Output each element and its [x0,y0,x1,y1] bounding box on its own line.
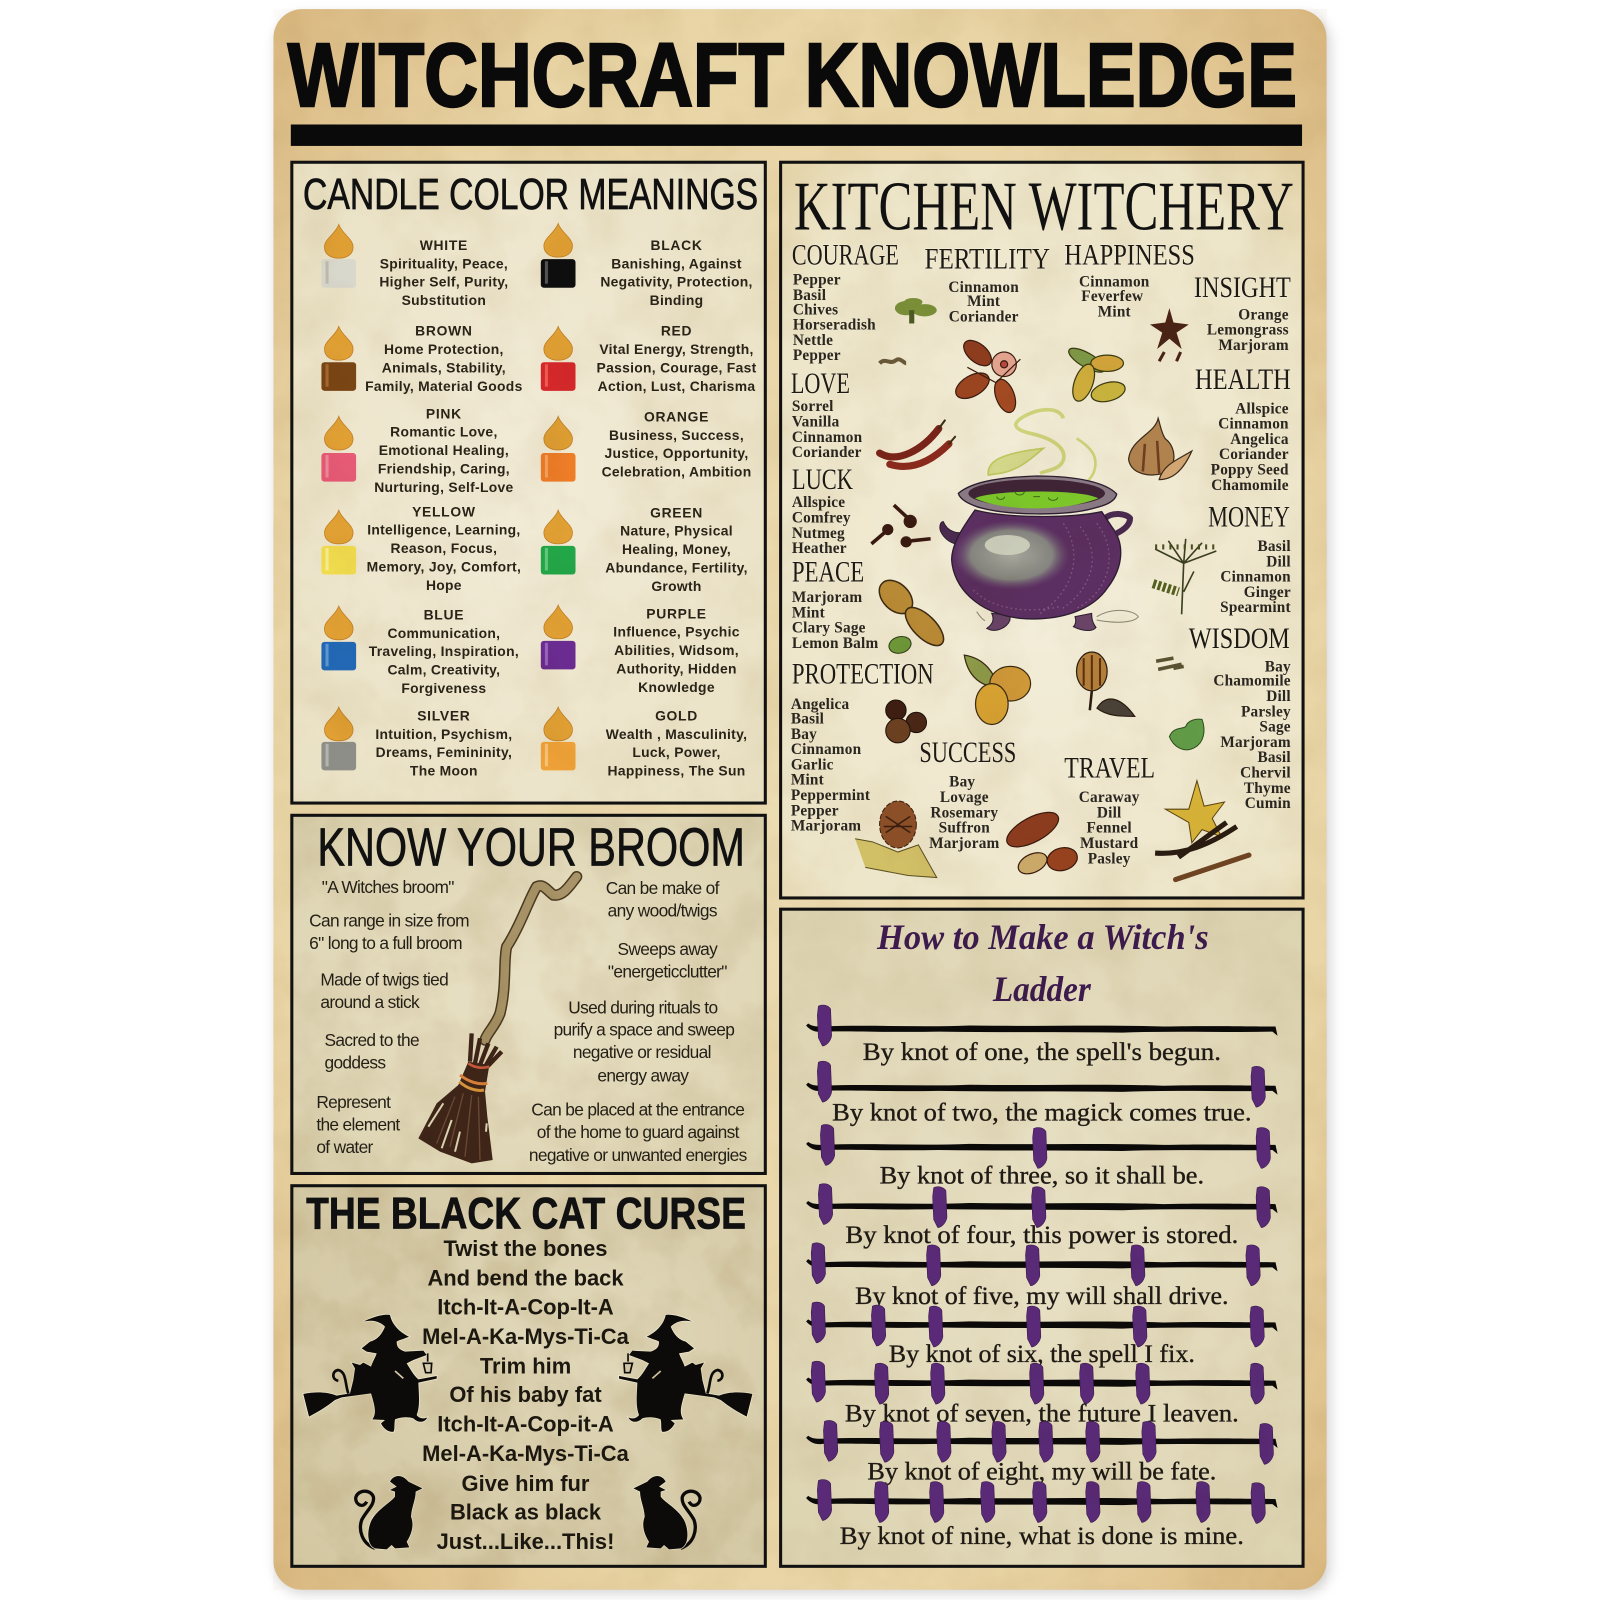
broom text left: 6" long to a full broom [309,933,462,953]
icon: witch left [303,1315,437,1432]
luck list [792,464,854,557]
text brown: Family, Material Goods [365,378,523,394]
protection list [791,659,934,835]
icon: dill plant [1153,539,1216,614]
wisdom list: Cumin [1245,795,1291,812]
courage list [792,239,899,364]
fertility list: Cinnamon [948,279,1019,296]
luck list: Nutmeg [792,525,845,542]
insight list: INSIGHT [1194,272,1291,304]
happiness list: Feverfew [1081,288,1143,305]
candle green [541,510,576,574]
wisdom list: Chervil [1240,765,1291,782]
poem text: Itch-It-A-Cop-it-A [437,1412,614,1437]
icon: pistachio [1065,344,1127,405]
heading: how to make a witch's ladder: Ladder [992,969,1092,1009]
broom text right: energy away [597,1066,689,1086]
broom text right: Used during rituals to [568,997,717,1017]
candle yellow [321,510,356,574]
courage list: COURAGE [792,239,899,271]
text gold: Luck, Power, [632,744,721,760]
broom text left: around a stick [320,992,420,1012]
peace list: PEACE [792,557,864,589]
candle black [541,223,576,288]
text black: Binding [650,292,703,308]
courage list: Pepper [793,272,841,289]
insight list [1194,272,1291,354]
wisdom list: Marjoram [1220,734,1291,751]
icon: hazelnuts [886,700,927,743]
icon: witch right [619,1315,752,1432]
protection list: Cinnamon [791,741,862,758]
ladder row 9 [806,1480,1278,1550]
protection list: Garlic [791,756,834,773]
health list: Angelica [1230,431,1289,448]
success list: SUCCESS [919,737,1016,769]
broom text left: Made of twigs tied [320,970,448,990]
panel: kitchen witchery [781,162,1303,898]
icon: pine cone [855,801,937,878]
money list: MONEY [1208,502,1290,534]
peace list [792,557,878,652]
heading: know your broom: KNOW YOUR BROOM [317,817,745,877]
candle red [541,327,576,391]
love list: Coriander [792,444,862,461]
happiness list: Mint [1098,303,1132,320]
text yellow: YELLOW [412,503,476,519]
fertility list: Mint [967,293,1001,310]
icon: mint sprig [895,298,937,323]
wisdom list: Sage [1259,719,1291,736]
ladder row 6 [806,1302,1278,1368]
broom text right: "energeticclutter" [608,962,727,982]
panel: candle color meanings [292,162,765,803]
text blue: Calm, Creativity, [387,661,500,677]
ladder row 7: By knot of seven, the future I leaven. [845,1400,1239,1427]
icon: cauldron [940,410,1138,631]
icon: small seeds [880,359,906,363]
text red: RED [661,323,692,339]
money list [1208,502,1292,616]
success list [919,737,1016,852]
text blue: Traveling, Inspiration, [369,643,519,659]
broom text right: of the home to guard against [537,1122,740,1142]
candle orange [541,416,576,482]
icon: fruit with leaf [964,655,1031,724]
text purple: Authority, Hidden [616,660,737,676]
money list: Cinnamon [1220,569,1291,586]
broom text right: negative or unwanted energies [529,1145,748,1165]
text silver: Dreams, Femininity, [376,744,512,760]
text green: Growth [651,578,702,594]
poem text: Just...Like...This! [437,1529,614,1554]
icon: garlic [1129,418,1192,480]
icon: peanut shell [873,574,950,652]
heading: kitchen witchery: KITCHEN WITCHERY [794,169,1294,246]
poem text: Give him fur [462,1471,590,1496]
broom text right: any wood/twigs [608,900,718,920]
text blue: Communication, [387,625,500,641]
candle gold [541,707,576,770]
candle silver [321,707,356,770]
ladder row 5: By knot of five, my will shall drive. [855,1283,1229,1310]
ladder row 9: By knot of nine, what is done is mine. [840,1523,1244,1550]
text red: Passion, Courage, Fast [597,359,757,375]
wisdom list: Thyme [1244,780,1291,797]
poem text: Mel-A-Ka-Mys-Ti-Ca [422,1441,630,1466]
text purple: Influence, Psychic [613,624,740,640]
love list: Sorrel [792,398,834,415]
panel: witch's ladder [781,909,1303,1566]
protection list: Marjoram [791,818,861,835]
poem text: Twist the bones [443,1236,608,1261]
wisdom list: Basil [1257,749,1291,766]
wisdom list: Chamomile [1213,673,1291,690]
broom text left: of water [316,1137,374,1157]
icon: peanuts [1002,805,1080,878]
text orange: ORANGE [644,408,709,424]
fertility list [924,243,1050,325]
broom text right: Can be placed at the entrance [531,1099,744,1119]
ladder row 6: By knot of six, the spell I fix. [889,1341,1195,1368]
text yellow: Memory, Joy, Comfort, [367,558,521,574]
travel list: Dill [1097,804,1121,821]
icon: green leaf [1169,719,1204,750]
broom text right: Can be make of [606,878,720,898]
ladder row 8: By knot of eight, my will be fate. [867,1459,1216,1486]
icon: chili peppers [880,420,955,466]
money list: Spearmint [1220,599,1292,616]
ladder row 4: By knot of four, this power is stored. [845,1222,1238,1249]
ladder row 1: By knot of one, the spell's begun. [863,1039,1221,1066]
travel list: Mustard [1080,835,1139,852]
text green: Healing, Money, [622,541,731,557]
luck list: Allspice [792,494,845,511]
happiness list: Cinnamon [1079,274,1150,291]
broom text left: Can range in size from [309,911,469,931]
courage list: Pepper [793,347,841,364]
poem text: Of his baby fat [449,1382,602,1407]
money list: Dill [1266,553,1291,570]
text pink: Friendship, Caring, [378,460,510,476]
travel list: Pasley [1088,850,1131,867]
text pink: PINK [426,405,462,421]
fertility list: FERTILITY [924,243,1050,275]
text gold: Wealth , Masculinity, [606,726,747,742]
wisdom list: Bay [1265,658,1291,675]
broom text right: Sweeps away [618,939,718,959]
protection list: Angelica [791,696,850,713]
text purple: PURPLE [646,605,707,621]
peace list: Mint [792,604,826,621]
insight list: Lemongrass [1207,322,1289,339]
travel list [1064,753,1155,867]
heading: the black cat curse: THE BLACK CAT CURSE [306,1188,746,1239]
ladder row 8 [806,1420,1278,1486]
text black: Negativity, Protection, [600,274,753,290]
ladder row 2: By knot of two, the magick comes true. [832,1099,1252,1126]
text green: Nature, Physical [620,523,733,539]
text white: Higher Self, Purity, [379,274,508,290]
wisdom list [1189,623,1291,812]
text red: Action, Lust, Charisma [598,378,755,394]
ladder row 1 [806,1005,1278,1066]
luck list: Comfrey [792,509,851,526]
candle white [321,224,356,288]
money list: Ginger [1244,584,1291,601]
broom text left: "A Witches broom" [322,877,454,897]
ladder row 5 [806,1243,1278,1310]
text pink: Nurturing, Self-Love [374,479,514,495]
love list [791,368,863,461]
title: WITCHCRAFT KNOWLEDGE [288,26,1297,126]
protection list: PROTECTION [792,659,934,691]
health list: Cinnamon [1218,416,1289,433]
broom text left: goddess [324,1052,386,1072]
icon: green bean [887,634,913,656]
text black: Banishing, Against [611,255,742,271]
courage list: Horseradish [793,317,876,334]
luck list: LUCK [792,464,854,496]
text white: Substitution [402,292,486,308]
poem text: Mel-A-Ka-Mys-Ti-Ca [422,1324,630,1349]
heading: how to make a witch's ladder: How to Make a Witch's [876,917,1209,957]
text white: Spirituality, Peace, [380,255,508,271]
health list [1195,364,1291,494]
peace list: Marjoram [792,589,862,606]
ladder row 7 [806,1361,1278,1427]
text pink: Emotional Healing, [379,442,509,458]
money list: Basil [1257,538,1291,555]
panel: know your broom [292,815,765,1173]
insight list: Marjoram [1218,337,1289,354]
icon: cloves [871,505,931,547]
text blue: Forgiveness [401,680,486,696]
text silver: SILVER [417,707,471,723]
broom text left: Represent [316,1092,391,1112]
text red: Vital Energy, Strength, [599,341,754,357]
travel list: Caraway [1079,789,1140,806]
happiness list [1064,239,1195,320]
broom text left: Sacred to the [324,1030,419,1050]
health list: Allspice [1235,400,1289,417]
text gold: GOLD [655,707,698,723]
wisdom list: Parsley [1241,703,1291,720]
candle blue [321,606,356,670]
health list: Chamomile [1211,477,1289,494]
candle brown [321,327,356,391]
text yellow: Intelligence, Learning, [367,522,521,538]
text pink: Romantic Love, [390,424,498,440]
love list: Vanilla [792,414,840,431]
success list: Lovage [940,789,989,806]
icon: seeds [1156,658,1184,669]
text yellow: Reason, Focus, [391,540,497,556]
ladder row 4 [806,1184,1278,1249]
broom text right: negative or residual [573,1042,711,1062]
poem text: And bend the back [427,1266,624,1291]
success list: Rosemary [930,804,998,821]
candle purple [541,605,576,669]
text yellow: Hope [426,577,462,593]
success list: Bay [949,774,975,791]
candle pink [321,416,356,482]
courage list: Basil [793,287,826,304]
love list: LOVE [791,368,850,400]
panel: black cat curse [292,1186,765,1566]
courage list: Chives [793,301,838,318]
broom text right: purify a space and sweep [554,1020,734,1040]
success list: Suffron [939,820,990,837]
icon: poppy [1077,652,1135,716]
insight list: Orange [1238,306,1289,323]
peace list: Lemon Balm [792,635,878,652]
love list: Cinnamon [792,429,863,446]
icon: star anise [1150,308,1189,361]
text silver: Intuition, Psychism, [375,726,512,742]
ladder row 2 [806,1061,1278,1126]
text green: GREEN [650,504,703,520]
protection list: Basil [791,710,824,727]
travel list: TRAVEL [1064,753,1155,785]
text orange: Justice, Opportunity, [605,445,749,461]
health list: Coriander [1219,446,1289,463]
title rule [291,124,1302,146]
happiness list: HAPPINESS [1064,239,1195,271]
protection list: Mint [791,772,825,789]
text brown: Home Protection, [384,341,504,357]
icon: cat left [356,1476,422,1549]
ladder row 3 [806,1124,1278,1190]
success list: Marjoram [929,835,1000,852]
text purple: Abilities, Widsom, [614,642,739,658]
wisdom list: Dill [1266,688,1291,705]
luck list: Heather [792,540,847,557]
poem text: Itch-It-A-Cop-It-A [437,1294,614,1319]
metal sign card [273,9,1327,1590]
card shadow [276,14,1331,1594]
protection list: Pepper [791,802,839,819]
poem text: Black as black [450,1499,602,1524]
text blue: BLUE [424,606,464,622]
health list: HEALTH [1195,364,1291,396]
health list: Poppy Seed [1211,461,1289,478]
text purple: Knowledge [638,679,715,695]
icon: broom [418,877,577,1163]
fertility list: Coriander [949,308,1019,325]
protection list: Peppermint [791,787,871,804]
protection list: Bay [791,726,817,743]
text brown: BROWN [415,323,473,339]
wisdom list: WISDOM [1189,623,1290,655]
text orange: Business, Success, [609,427,744,443]
text gold: Happiness, The Sun [608,763,746,779]
broom text left: the element [316,1115,400,1135]
icon: cacao and flower [951,336,1020,415]
icon: cat right [633,1476,700,1549]
text brown: Animals, Stability, [382,359,506,375]
courage list: Nettle [793,332,833,349]
ladder row 3: By knot of three, so it shall be. [880,1163,1204,1190]
icon: vanilla flower and pods [1155,781,1249,880]
poem text: Trim him [480,1353,571,1378]
text green: Abundance, Fertility, [605,559,748,575]
text black: BLACK [650,237,703,253]
peace list: Clary Sage [792,620,866,637]
travel list: Fennel [1086,820,1132,837]
heading: candle color meanings: CANDLE COLOR MEANINGS [303,170,758,219]
text white: WHITE [420,237,468,253]
text orange: Celebration, Ambition [602,464,751,480]
text silver: The Moon [410,763,478,779]
heading: how to make a witch's ladder [876,917,1209,1009]
